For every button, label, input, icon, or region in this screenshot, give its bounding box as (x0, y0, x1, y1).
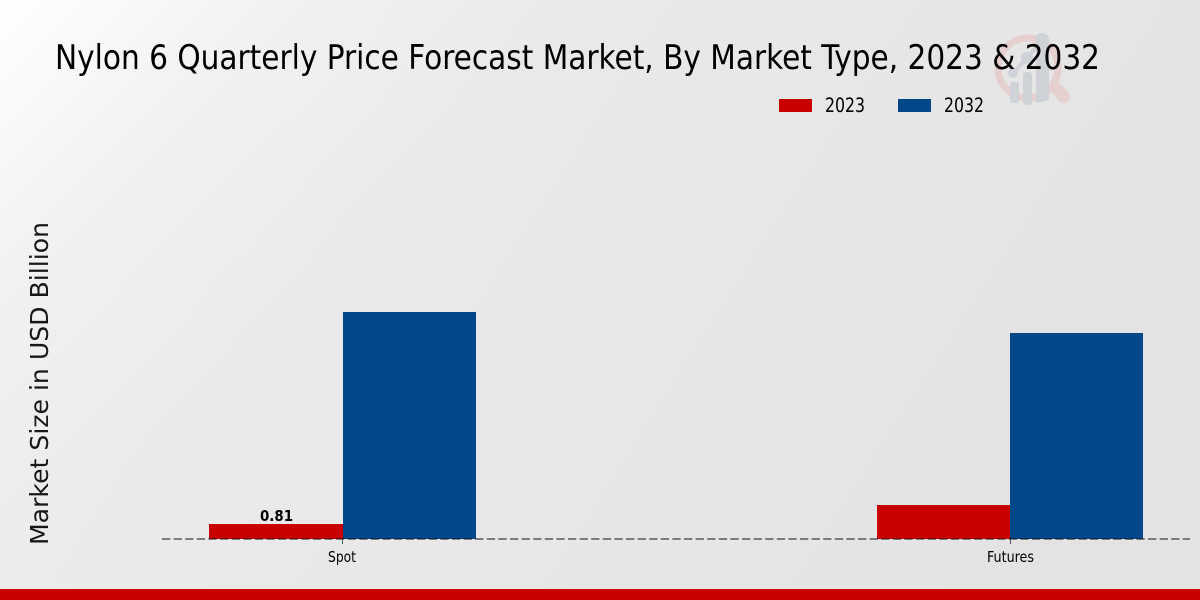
bar chart (162, 312, 1190, 566)
legend item: 2023 (779, 94, 865, 117)
x label: Spot: Spot (328, 548, 356, 566)
legend item: 2032 (898, 94, 984, 117)
legend item: 2032: 2032 (944, 94, 984, 117)
group: Spot (209, 312, 476, 539)
legend item: 2023: 2023 (825, 94, 865, 117)
icon: watermark logo (998, 33, 1064, 105)
footer bar (0, 589, 1200, 600)
value label: 0.81 (260, 507, 293, 525)
y axis title: Market Size in USD Billion (25, 222, 54, 545)
group: Futures (877, 333, 1143, 539)
title: Nylon 6 Quarterly Price Forecast Market, By Market Type, 2023 & 2032 (55, 38, 1100, 78)
legend (779, 94, 984, 117)
x label: Futures: Futures (987, 548, 1034, 566)
